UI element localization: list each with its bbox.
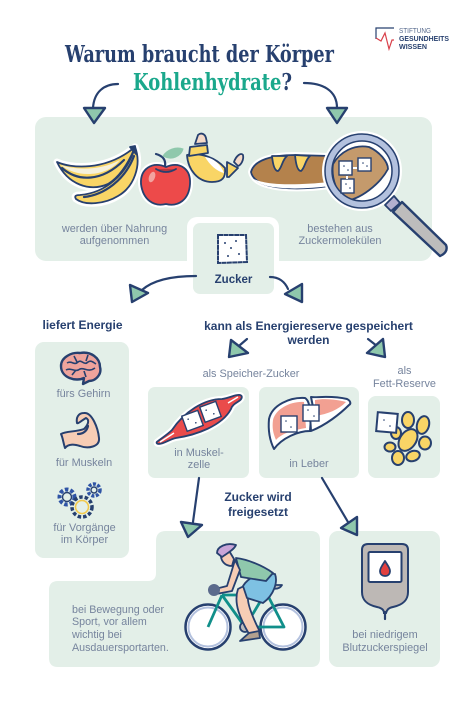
text: Zuckermoleküle: Zuckermolekülen (299, 235, 381, 247)
arrow: Zucker to Energiereserve (270, 277, 302, 302)
title: Warum braucht der Körper (64, 41, 335, 68)
icon: flexed arm (61, 413, 99, 448)
icon: fat cells (376, 412, 431, 465)
icon: apple (141, 148, 190, 205)
icon: blood glucose meter (362, 544, 408, 619)
logo: Stiftung Gesundheitswissen (376, 28, 449, 51)
text: Blutzuckerspiegel: bei niedrigem (352, 629, 418, 641)
text: Speicher-Zucker: als Speicher-Zucker (203, 368, 300, 380)
panel: Blutzucker (329, 531, 440, 667)
heading: Zucker wird freigesetzt: Zucker wird (224, 490, 292, 504)
icon: sugar cube (218, 235, 247, 263)
text: Sport: wichtig bei (71, 629, 122, 641)
icon: bananas (57, 146, 138, 203)
title: Kohlenhydrate? (133, 69, 292, 96)
title (64, 41, 335, 96)
arrow: to Fett-Reserve (367, 339, 385, 357)
panel: Muskelzelle (148, 387, 249, 478)
arrow: to Speicher-Zucker (229, 339, 248, 357)
arrow: title to food (84, 84, 118, 123)
arrow: Leber to Blutzucker (322, 478, 357, 535)
heading: Zucker wird freigesetzt: freigesetzt (228, 505, 288, 519)
panel: food and molecules (35, 117, 432, 261)
text: in Muskelzelle: zelle (188, 459, 210, 471)
panel: liefert Energie (35, 342, 129, 558)
text: Muskeln: für Muskeln (56, 457, 112, 469)
arrow: title to bread (304, 83, 347, 123)
panel: Zucker: Zucker (215, 274, 253, 286)
text: Fett-Reserve: Fett-Reserve (373, 378, 436, 390)
icon: magnifying glass (324, 133, 447, 256)
icon: croissant (187, 134, 243, 182)
text: Sport: Ausdauersportarten. (72, 642, 169, 654)
heading: Energiereserve: werden (286, 333, 330, 347)
icon: gears (60, 484, 100, 517)
icon: sugar molecules (339, 158, 371, 193)
text: Sport: Sport, vor allem (72, 616, 147, 628)
text: Sport: bei Bewegung oder (72, 604, 164, 616)
logo: Stiftung Gesundheitswissen: STIFTUNG (399, 28, 431, 35)
panel: Leber (259, 387, 359, 478)
icon: liver (269, 397, 350, 449)
text: Fett-Reserve: als (398, 365, 411, 377)
icon: cyclist (186, 544, 306, 650)
text: Nahrung: aufgenommen (80, 235, 149, 247)
text: in Leber: in Leber (289, 458, 329, 470)
panel: Zucker (187, 217, 279, 299)
logo: Stiftung Gesundheitswissen: WISSEN (399, 44, 427, 51)
arrow: Muskelzelle to Sport (181, 478, 202, 537)
heading: liefert Energie: liefert Energie (42, 318, 123, 332)
icon: muscle cell (157, 395, 242, 444)
text: Zuckermoleküle: bestehen aus (307, 223, 373, 235)
panel: Sport (49, 531, 320, 667)
text: Vorgänge: im Körper (61, 534, 108, 546)
icon: bread (251, 155, 330, 188)
text: Gehirn: fürs Gehirn (57, 388, 110, 400)
arrow: Zucker to Energie (130, 276, 196, 302)
panel: Fett-Reserve (368, 396, 440, 478)
icon: brain (61, 353, 100, 384)
heading: Energiereserve: kann als Energiereserve gespeichert (204, 319, 413, 333)
logo: Stiftung Gesundheitswissen: GESUNDHEITS (399, 36, 449, 43)
text: Blutzuckerspiegel: Blutzuckerspiegel (342, 642, 428, 654)
text: Nahrung: werden über Nahrung (62, 223, 167, 235)
text: Vorgänge: für Vorgänge (53, 522, 116, 534)
text: in Muskelzelle: in Muskel- (174, 447, 224, 459)
